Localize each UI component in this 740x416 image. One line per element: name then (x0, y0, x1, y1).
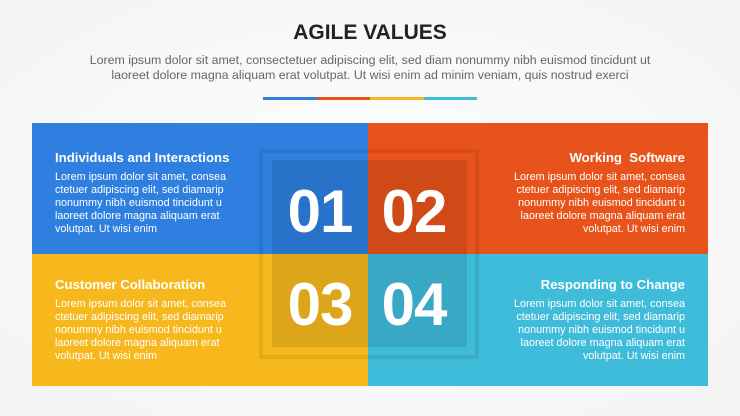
body text: volutpat. Ut wisi enim (55, 350, 157, 362)
body text: nonummy nibh euismod tincidunt u (518, 197, 685, 209)
subtitle text: laoreet dolore magna aliquam erat volutpat. Ut wisi enim ad minim veniam, quis nostrud exerci (111, 68, 629, 82)
body text (514, 298, 685, 362)
center frame outer (259, 149, 479, 359)
heading: Responding to Change (541, 277, 685, 292)
panel: working software (368, 123, 708, 254)
subtitle text: Lorem ipsum dolor sit amet, consectetuer adipiscing elit, sed diam nonummy nibh euismod tincidunt ut (90, 53, 650, 67)
panel: customer collaboration (32, 254, 368, 386)
number 03: 03 (288, 271, 352, 338)
heading: Individuals and Interactions (55, 150, 229, 165)
subtitle text (90, 53, 650, 82)
body text: Lorem ipsum dolor sit amet, consea (55, 171, 226, 183)
body text (514, 171, 685, 235)
body text (55, 171, 226, 235)
body text: Lorem ipsum dolor sit amet, consea (55, 298, 226, 310)
body text: nonummy nibh euismod tincidunt u (55, 197, 222, 209)
body text: ctetuer adipiscing elit, sed diamarip (55, 311, 224, 323)
body text: ctetuer adipiscing elit, sed diamarip (55, 184, 224, 196)
body text: laoreet dolore magna aliquam erat (55, 210, 219, 222)
body text: volutpat. Ut wisi enim (583, 350, 685, 362)
heading: Customer Collaboration (55, 277, 205, 292)
panel: responding to change (368, 254, 708, 386)
title: AGILE VALUES (293, 21, 447, 44)
body text: volutpat. Ut wisi enim (55, 223, 157, 235)
body text: laoreet dolore magna aliquam erat (521, 337, 685, 349)
divider bar (263, 97, 477, 100)
body text: nonummy nibh euismod tincidunt u (518, 324, 685, 336)
panel: individuals and interactions (32, 123, 368, 254)
body text: ctetuer adipiscing elit, sed diamarip (516, 184, 685, 196)
body text: Lorem ipsum dolor sit amet, consea (514, 298, 685, 310)
number 02: 02 (382, 178, 446, 245)
number 01: 01 (288, 178, 352, 245)
body text: laoreet dolore magna aliquam erat (55, 337, 219, 349)
body text: ctetuer adipiscing elit, sed diamarip (516, 311, 685, 323)
body text: nonummy nibh euismod tincidunt u (55, 324, 222, 336)
number 04: 04 (382, 271, 446, 338)
heading: Working Software (569, 150, 685, 165)
body text: Lorem ipsum dolor sit amet, consea (514, 171, 685, 183)
center frame inner (272, 160, 467, 347)
body text: volutpat. Ut wisi enim (583, 223, 685, 235)
body text (55, 298, 226, 362)
body text: laoreet dolore magna aliquam erat (521, 210, 685, 222)
